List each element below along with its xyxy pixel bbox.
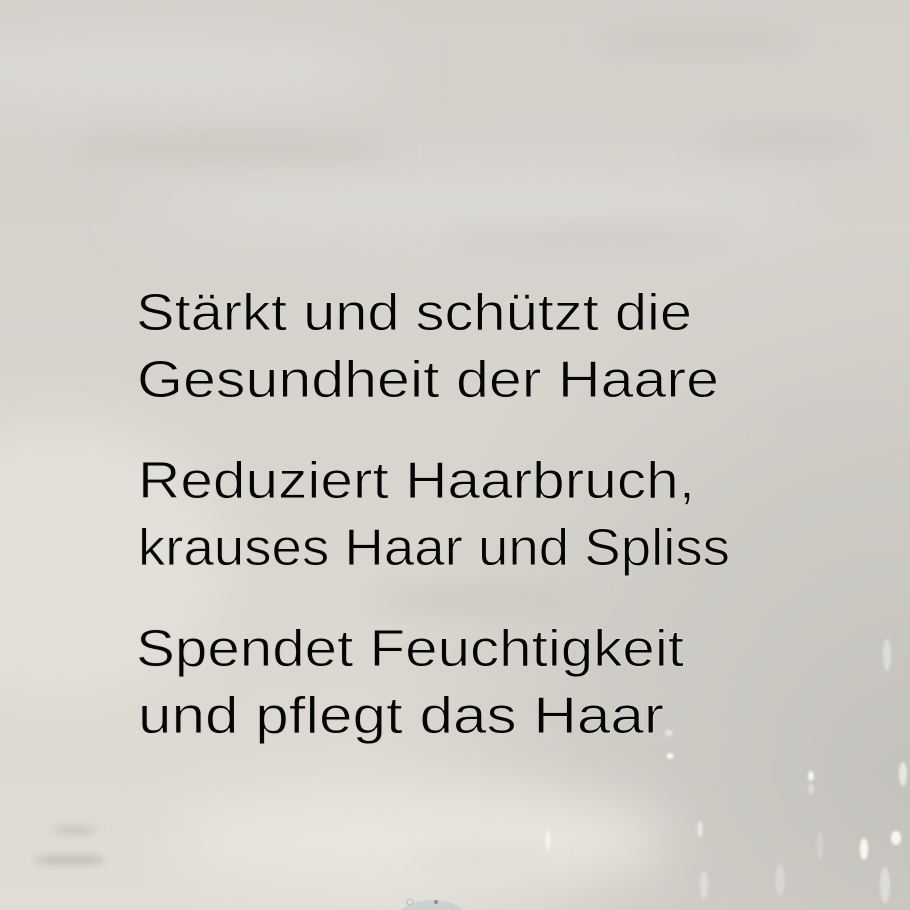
benefit text: moisturises xyxy=(136,620,685,745)
benefit text: moisturises: und pflegt das Haar xyxy=(138,687,664,745)
benefit text: strengthens and protects: Stärkt und schützt die xyxy=(136,284,692,342)
benefit text: strengthens and protects xyxy=(136,284,719,409)
benefit text: reduces breakage xyxy=(138,452,730,577)
benefit text: reduces breakage: Reduziert Haarbruch, xyxy=(138,452,695,510)
benefit text: reduces breakage: krauses Haar und Spliss xyxy=(138,519,730,577)
benefit text: strengthens and protects: Gesundheit der Haare xyxy=(137,351,719,409)
bottle cap at bottom edge xyxy=(396,899,468,910)
benefit text: moisturises: Spendet Feuchtigkeit xyxy=(136,620,685,678)
water droplets xyxy=(545,639,907,903)
